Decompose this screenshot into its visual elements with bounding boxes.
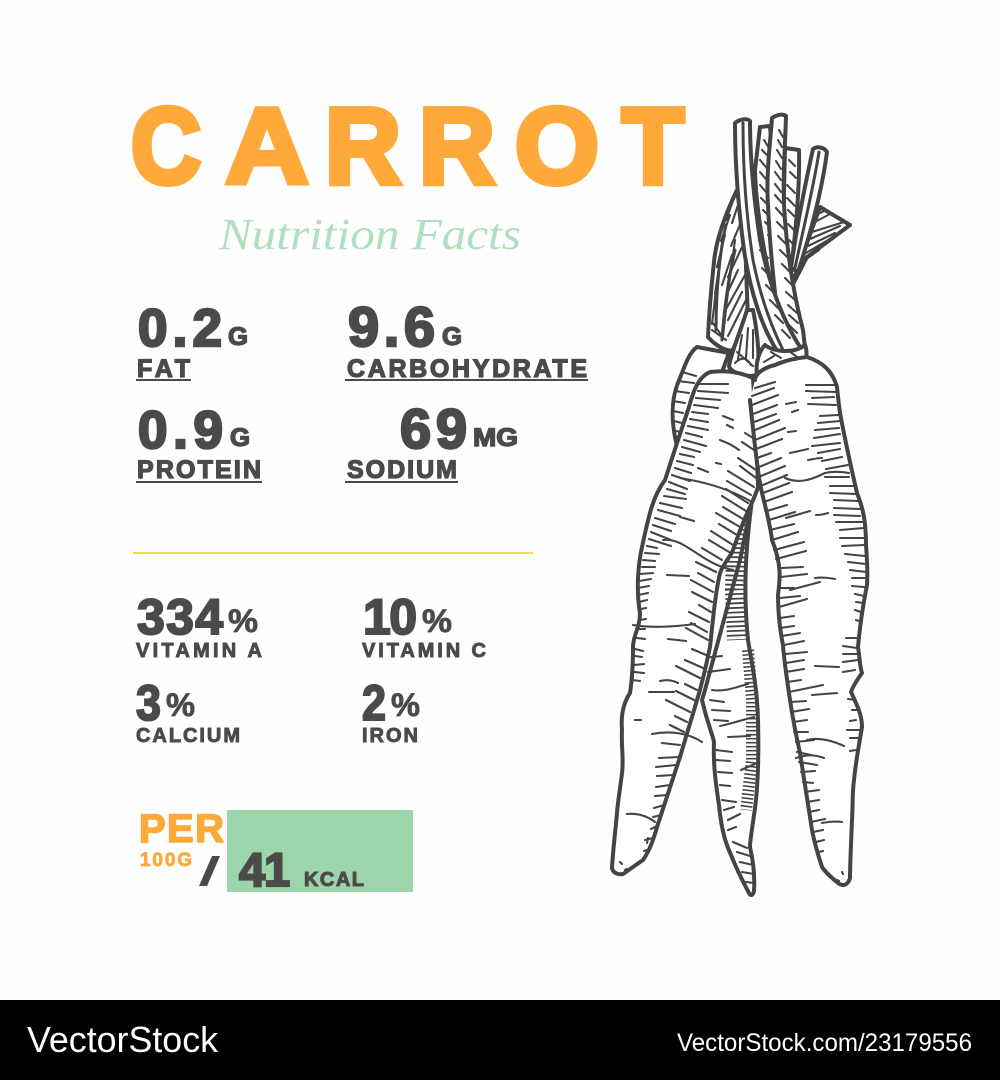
stat: carbohydrate [345,295,588,383]
stat: iron [362,675,420,747]
carrot: back left shoulder [673,347,729,442]
stat: sodium [345,397,518,484]
stat: vitamin C: 10 [363,589,417,645]
stat: vitamin A: 334 [137,589,223,645]
footer bar [0,1000,1000,1080]
stat: vitamin A: % [228,603,258,639]
stat: carbohydrate: G [442,323,462,351]
energy callout: per 100g 41 kcal: PER [139,807,224,851]
stat: vitamin C: VITAMIN C [362,640,486,662]
title: CARROT [131,85,684,206]
energy callout: per 100g 41 kcal: 41 [239,843,290,896]
stat: vitamin C: % [422,603,452,639]
stat: calcium [136,675,240,747]
stat: fat: 0.2 [138,299,222,358]
stat: iron: % [391,687,420,723]
stat: iron: 2 [362,675,386,731]
stat: protein [136,401,262,484]
stat: calcium: CALCIUM [136,725,240,747]
stat: calcium: % [166,687,195,723]
footer bar: VectorStock.com/23179556 [677,1029,972,1057]
carrot: left front [612,371,758,874]
stat: vitamin A: VITAMIN A [136,640,262,662]
stat: protein: 0.9 [138,401,223,460]
stat: protein: PROTEIN [137,456,261,484]
title: CARROT: R [325,85,401,206]
energy callout: per 100g 41 kcal: KCAL [304,869,364,891]
subtitle: Nutrition Facts: Nutrition Facts [218,210,521,259]
stat: carbohydrate: 9.6 [348,295,435,358]
carrot tops [708,115,850,376]
title: CARROT: T [622,85,684,206]
energy callout: per 100g 41 kcal [139,807,413,896]
title: CARROT: R [419,85,495,206]
stat: fat [136,299,248,383]
stat: fat: G [228,323,248,351]
stat: calcium: 3 [136,675,161,731]
carrot: middle back [702,500,758,895]
carrot: right front [750,357,867,885]
stat: carbohydrate: CARBOHYDRATE [347,355,587,383]
stat: protein: G [230,424,250,452]
stat: vitamin A [136,589,262,662]
title: CARROT: A [225,85,309,206]
energy callout: per 100g 41 kcal: 100G [140,850,192,871]
footer bar: VectorStock [27,1019,219,1060]
stat: iron: IRON [362,725,418,747]
stat: fat: FAT [137,355,190,383]
stat: sodium: SODIUM [347,456,457,484]
title: CARROT: O [515,85,599,206]
illustration: carrot bunch [612,115,867,895]
stat: vitamin C [362,589,486,662]
title: CARROT: C [131,85,201,206]
stat: sodium: MG [473,424,518,452]
stat: sodium: 69 [400,397,467,460]
